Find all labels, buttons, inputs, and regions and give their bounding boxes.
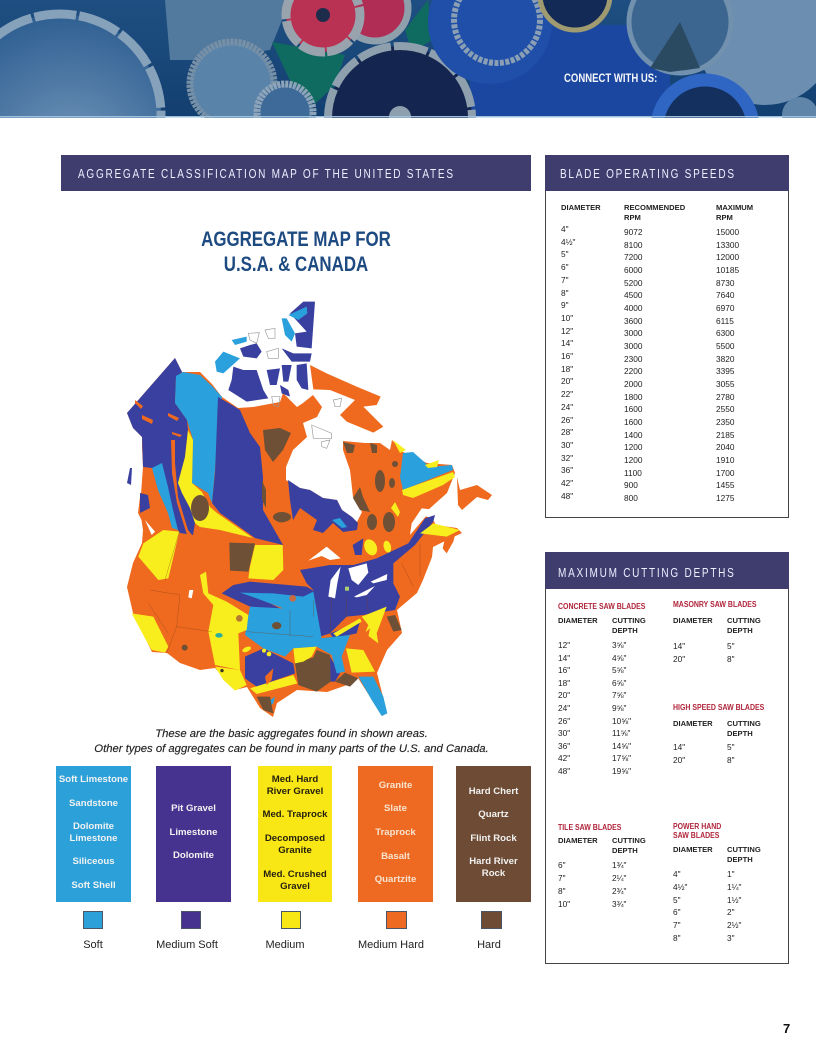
legend card: medium soft: Limestone	[170, 827, 217, 838]
column: diameters: 36"	[561, 465, 573, 475]
concrete saw blades table: 14"	[558, 653, 570, 663]
tile saw blades table: TILE SAW BLADES	[558, 822, 621, 832]
column: maximum rpm: 8730	[716, 278, 734, 288]
concrete saw blades table: DIAMETER	[558, 616, 598, 625]
tile saw blades table: DEPTH	[612, 846, 638, 854]
column: maximum rpm: 2350	[716, 417, 734, 427]
power hand saw blades table: 2"	[727, 907, 735, 917]
column: maximum rpm: 1275	[716, 493, 734, 503]
masonry saw blades table: 14"	[673, 641, 685, 651]
column: diameters: 5"	[561, 249, 569, 259]
power hand saw blades table: DIAMETER	[673, 845, 713, 854]
column: recommended rpm: 1800	[624, 392, 642, 402]
masonry saw blades table: CUTTING	[727, 616, 761, 625]
column: maximum rpm: 1700	[716, 468, 734, 478]
legend card: hard: Hard River	[469, 856, 518, 867]
panel: maximum cutting depths: 8"	[673, 933, 681, 943]
column: recommended rpm: 1100	[624, 468, 642, 478]
column: maximum rpm: 5500	[716, 341, 734, 351]
concrete saw blades table: 30"	[558, 728, 570, 738]
legend card: soft: Limestone	[70, 833, 117, 844]
legend card: medium soft: Pit Gravel	[171, 803, 216, 814]
map caption	[94, 728, 489, 755]
Arctic islands and Baffin	[215, 302, 383, 448]
legend swatch: soft	[83, 911, 103, 929]
legend card: soft	[56, 766, 131, 902]
panel heading: aggregate classification map: AGGREGATE CLASSIFICATION MAP OF THE UNITED STATES	[78, 166, 455, 181]
legend card: hard: Flint Rock	[470, 833, 517, 844]
table header: diameter: DIAMETER	[561, 203, 601, 212]
Quebec and Atlantic Canada regions	[343, 440, 492, 532]
legend card: medium hard: Slate	[384, 803, 407, 814]
column: recommended rpm: 2300	[624, 354, 642, 364]
tile saw blades table: 8"	[558, 886, 566, 896]
concrete saw blades table: 9⅝"	[612, 703, 626, 713]
tile saw blades table: 2¼"	[612, 873, 626, 883]
high speed saw blades table: HIGH SPEED SAW BLADES	[673, 702, 764, 712]
tile saw blades table: 1¾"	[612, 860, 626, 870]
legend card: hard: Quartz	[478, 809, 509, 820]
concrete saw blades table: 6⅝"	[612, 678, 626, 688]
column: maximum rpm: 2780	[716, 392, 734, 402]
legend card: medium hard	[358, 766, 433, 902]
high speed saw blades table	[673, 702, 764, 765]
column: diameters: 10"	[561, 313, 573, 323]
concrete saw blades table: 24"	[558, 703, 570, 713]
legend card: medium: Gravel	[280, 881, 310, 892]
power hand saw blades table: 5"	[673, 895, 681, 905]
column: diameters: 4½"	[561, 237, 575, 247]
power hand saw blades table: 4½"	[673, 882, 687, 892]
column: diameters: 32"	[561, 453, 573, 463]
column: recommended rpm: 6000	[624, 265, 642, 275]
column: recommended rpm: 1600	[624, 417, 642, 427]
panel: blade operating speeds	[545, 155, 789, 518]
masonry saw blades table: 8"	[727, 654, 735, 664]
column: maximum rpm: 3395	[716, 366, 734, 376]
legend card: hard	[456, 766, 531, 902]
legend card: medium soft	[156, 766, 231, 902]
power hand saw blades table: CUTTING	[727, 845, 761, 854]
legend card: soft: Dolomite	[73, 821, 114, 832]
column: diameters: 6"	[561, 262, 569, 272]
base continent silhouette	[127, 358, 462, 717]
column: maximum rpm: 10185	[716, 265, 739, 275]
column: recommended rpm: 2200	[624, 366, 642, 376]
legend swatch: medium hard	[386, 911, 407, 929]
concrete saw blades table: 12"	[558, 640, 570, 650]
table header: maximum rpm: MAXIMUM	[716, 203, 753, 212]
legend card: medium hard: Quartzite	[375, 874, 416, 885]
western and prairie Canada regions	[127, 358, 358, 545]
legend card: medium: Med. Crushed	[263, 869, 327, 880]
concrete saw blades table: 17⅝"	[612, 753, 631, 763]
column: diameters: 22"	[561, 389, 573, 399]
map title	[201, 227, 391, 276]
power hand saw blades table: 1"	[727, 869, 735, 879]
power hand saw blades table: 1½"	[727, 895, 741, 905]
legend card: soft: Siliceous	[72, 856, 115, 867]
column: diameters: 42"	[561, 478, 573, 488]
legend card: medium	[258, 766, 332, 902]
column: recommended rpm: 5200	[624, 278, 642, 288]
legend card: medium: River Gravel	[267, 786, 323, 797]
concrete saw blades table: 7⅝"	[612, 690, 626, 700]
column: diameters: 18"	[561, 364, 573, 374]
concrete saw blades table: 4⅝"	[612, 653, 626, 663]
column: diameters: 4"	[561, 224, 569, 234]
high speed saw blades table: 14"	[673, 742, 685, 752]
column: maximum rpm: 2550	[716, 404, 734, 414]
concrete saw blades table: 36"	[558, 741, 570, 751]
column: recommended rpm: 1200	[624, 455, 642, 465]
panel heading: aggregate classification map	[61, 155, 531, 191]
column: maximum rpm: 12000	[716, 252, 739, 262]
column: recommended rpm: 3600	[624, 316, 642, 326]
tile saw blades table: CUTTING	[612, 836, 646, 845]
column: maximum rpm: 3055	[716, 379, 734, 389]
tile saw blades table: 6"	[558, 860, 566, 870]
column: recommended rpm: 3000	[624, 328, 642, 338]
masonry saw blades table	[673, 599, 761, 664]
column: diameters: 8"	[561, 288, 569, 298]
column: diameters: 28"	[561, 427, 573, 437]
column: maximum rpm: 6115	[716, 316, 734, 326]
concrete saw blades table: 20"	[558, 690, 570, 700]
tile saw blades table	[558, 822, 646, 909]
high speed saw blades table: DIAMETER	[673, 719, 713, 728]
legend swatch: medium soft	[181, 911, 201, 929]
column: maximum rpm: 15000	[716, 227, 739, 237]
column: maximum rpm: 1455	[716, 480, 734, 490]
power hand saw blades table	[673, 821, 761, 943]
heading: maximum cutting depths: MAXIMUM CUTTING DEPTHS	[558, 565, 736, 580]
page number: 7	[783, 1021, 790, 1036]
legend card: hard: Hard Chert	[469, 786, 518, 797]
column: recommended rpm: 9072	[624, 227, 642, 237]
high speed saw blades table: 5"	[727, 742, 735, 752]
concrete saw blades table: 19⅝"	[612, 766, 631, 776]
panel: maximum cutting depths: 3"	[727, 933, 735, 943]
power hand saw blades table: DEPTH	[727, 854, 753, 864]
heading: blade operating speeds: BLADE OPERATING SPEEDS	[560, 166, 736, 181]
legend swatch: medium	[281, 911, 301, 929]
concrete saw blades table: 48"	[558, 766, 570, 776]
column: maximum rpm: 2185	[716, 430, 734, 440]
United States regions	[132, 508, 460, 716]
legend card: medium soft: Dolomite	[173, 850, 214, 861]
column: diameters: 26"	[561, 415, 573, 425]
masonry saw blades table: MASONRY SAW BLADES	[673, 599, 757, 609]
table header: maximum rpm	[716, 203, 753, 222]
map title: AGGREGATE MAP FOR	[201, 227, 391, 251]
tile saw blades table: 3¾"	[612, 899, 626, 909]
concrete saw blades table: 42"	[558, 753, 570, 763]
column: recommended rpm: 7200	[624, 252, 642, 262]
legend label: hard: Hard	[477, 939, 501, 951]
legend card: medium: Granite	[278, 845, 312, 856]
tile saw blades table: 2¾"	[612, 886, 626, 896]
column: diameters: 48"	[561, 491, 573, 501]
map title: U.S.A. & CANADA	[224, 252, 368, 276]
high speed saw blades table: DEPTH	[727, 728, 753, 738]
concrete saw blades table: 16"	[558, 665, 570, 675]
concrete saw blades table	[558, 601, 646, 776]
concrete saw blades table: 11⅝"	[612, 728, 630, 738]
masonry saw blades table: 20"	[673, 654, 685, 664]
map caption: These are the basic aggregates found in shown areas.	[155, 728, 428, 740]
power hand saw blades table: POWER HAND	[673, 821, 721, 831]
legend card: medium: Med. Hard	[272, 774, 318, 785]
column: recommended rpm: 8100	[624, 240, 642, 250]
column: diameters: 7"	[561, 275, 569, 285]
column: diameters	[561, 224, 576, 501]
legend card: medium hard: Granite	[379, 780, 412, 791]
concrete saw blades table: 26"	[558, 716, 570, 726]
concrete saw blades table: 3⅝"	[612, 640, 626, 650]
table header: recommended rpm: RECOMMENDED	[624, 203, 685, 212]
column: diameters: 20"	[561, 376, 573, 386]
high speed saw blades table: 20"	[673, 755, 685, 765]
column: recommended rpm: 1600	[624, 404, 642, 414]
power hand saw blades table: SAW BLADES	[673, 830, 719, 840]
high speed saw blades table: 8"	[727, 755, 735, 765]
column: maximum rpm: 2040	[716, 442, 734, 452]
column: recommended rpm: 800	[624, 493, 638, 503]
heading: maximum cutting depths	[545, 552, 789, 589]
concrete saw blades table: 5⅝"	[612, 665, 626, 675]
legend label: medium soft: Medium Soft	[156, 939, 218, 951]
legend card: medium: Decomposed	[265, 833, 325, 844]
concrete saw blades table: 18"	[558, 678, 570, 688]
column: recommended rpm: 4000	[624, 303, 642, 313]
panel: maximum cutting depths	[545, 552, 789, 964]
tile saw blades table: 10"	[558, 899, 570, 909]
concrete saw blades table: CUTTING	[612, 616, 646, 625]
legend card: soft: Soft Shell	[71, 880, 116, 891]
column: maximum rpm: 7640	[716, 290, 734, 300]
power hand saw blades table: 1¼"	[727, 882, 741, 892]
column: maximum rpm: 1910	[716, 455, 734, 465]
column: recommended rpm: 1200	[624, 442, 642, 452]
power hand saw blades table: 6"	[673, 907, 681, 917]
masonry saw blades table: 5"	[727, 641, 735, 651]
concrete saw blades table: DEPTH	[612, 626, 638, 634]
power hand saw blades table: 2½"	[727, 920, 741, 930]
concrete saw blades table: CONCRETE SAW BLADES	[558, 601, 645, 611]
tile saw blades table: 7"	[558, 873, 566, 883]
legend swatch: hard	[481, 911, 502, 929]
high speed saw blades table: CUTTING	[727, 719, 761, 728]
heading: blade operating speeds	[545, 155, 789, 191]
table header: recommended rpm	[624, 203, 685, 222]
column: diameters: 14"	[561, 338, 573, 348]
connect with us label: CONNECT WITH US:	[564, 73, 657, 85]
legend label: medium: Medium	[265, 939, 305, 951]
column: recommended rpm	[624, 227, 642, 503]
power hand saw blades table: 7"	[673, 920, 681, 930]
map caption: Other types of aggregates can be found in many parts of the U.S. and Canada.	[94, 743, 489, 755]
column: maximum rpm: 6300	[716, 328, 734, 338]
tile saw blades table: DIAMETER	[558, 836, 598, 845]
column: maximum rpm: 6970	[716, 303, 734, 313]
masonry saw blades table: DEPTH	[727, 626, 753, 634]
column: diameters: 30"	[561, 440, 573, 450]
column: diameters: 12"	[561, 326, 573, 336]
legend card: hard: Rock	[482, 868, 505, 879]
masonry saw blades table: DIAMETER	[673, 616, 713, 625]
column: recommended rpm: 1400	[624, 430, 642, 440]
header banner: saw blades photo	[0, 0, 816, 118]
column: diameters: 24"	[561, 402, 573, 412]
column: diameters: 9"	[561, 300, 569, 310]
legend card: soft: Sandstone	[69, 798, 118, 809]
column: diameters: 16"	[561, 351, 573, 361]
column: maximum rpm: 3820	[716, 354, 734, 364]
table header: recommended rpm: RPM	[624, 212, 641, 222]
legend card: medium: Med. Traprock	[262, 809, 328, 820]
legend label: medium hard: Medium Hard	[358, 939, 424, 951]
column: recommended rpm: 4500	[624, 290, 642, 300]
column: maximum rpm: 13300	[716, 240, 739, 250]
legend card: medium hard: Basalt	[381, 851, 410, 862]
concrete saw blades table: 10⅝"	[612, 716, 631, 726]
column: recommended rpm: 3000	[624, 341, 642, 351]
column: maximum rpm	[716, 227, 739, 503]
legend card: medium hard: Traprock	[375, 827, 416, 838]
power hand saw blades table: 4"	[673, 869, 681, 879]
column: recommended rpm: 2000	[624, 379, 642, 389]
concrete saw blades table: 14⅝"	[612, 741, 631, 751]
table header: maximum rpm: RPM	[716, 212, 733, 222]
column: recommended rpm: 900	[624, 480, 638, 490]
legend card: soft: Soft Limestone	[59, 774, 128, 785]
legend label: soft: Soft	[83, 939, 103, 951]
